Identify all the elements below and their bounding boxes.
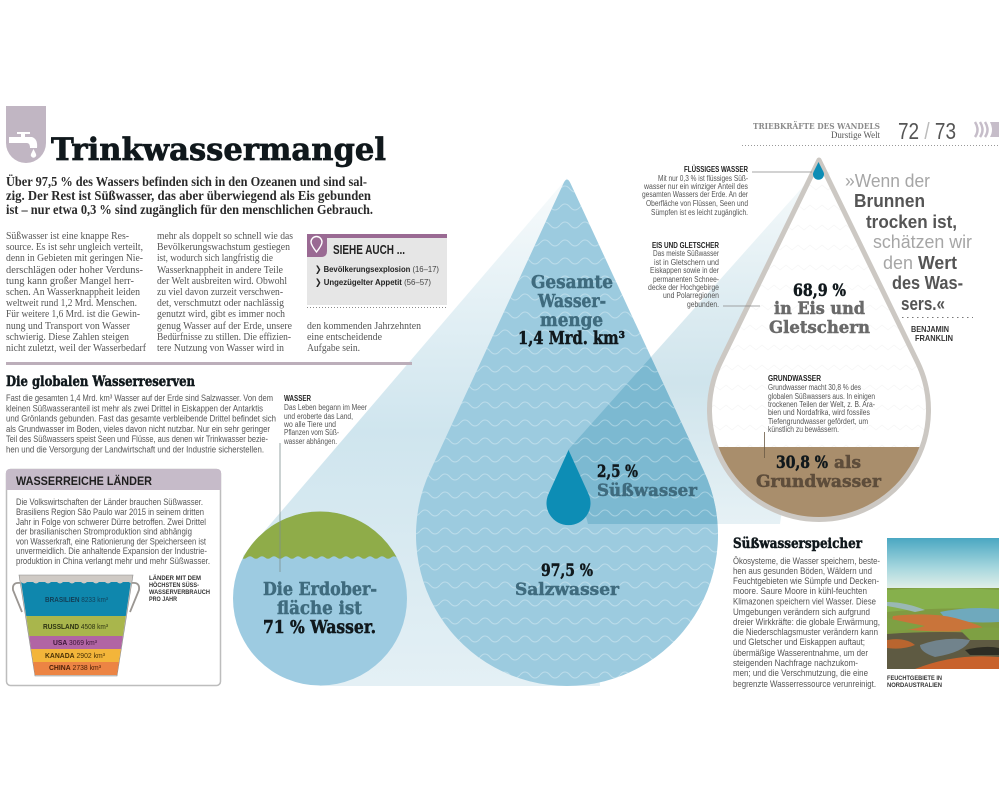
freshwater storage text: moore. Saure Moore in kühl-feuchten — [733, 586, 867, 597]
see also links: ❯ Bevölkerungsexplosion (16–17) — [315, 264, 439, 275]
label: water: wasser abhängen. — [283, 437, 337, 446]
groundwater label: Tiefengrundwasser gefördert, um — [768, 417, 868, 426]
body text column 2: Bevölkerungswachstum gestiegen — [157, 242, 290, 253]
intro text: zig. Der Rest ist Süßwasser, das aber überwiegend als Eis gebunden — [6, 189, 371, 204]
body text column 1: schwierig. Diese Zahlen steigen — [6, 332, 129, 343]
ice text — [769, 281, 870, 338]
page number: 72 / 73 — [898, 118, 956, 144]
icon: page chevrons — [975, 122, 999, 137]
salt water text: 97,5 % — [541, 561, 593, 581]
section text — [6, 393, 276, 454]
circle text: 71 % Wasser. — [263, 618, 376, 638]
icon: tiny liquid water drop — [813, 162, 824, 180]
body text column 1: schen. An Wasserknappheit leiden — [6, 287, 140, 298]
quote: trocken ist, — [866, 211, 957, 232]
bucket chart: USA 3069 km³ — [53, 638, 97, 647]
body text column 2: Wasserknappheit in andere Teile — [157, 265, 284, 276]
bucket caption: LÄNDER MIT DEM — [149, 574, 201, 582]
circle: earth surface — [233, 512, 407, 686]
bucket chart: RUSSLAND 4508 km³ — [43, 622, 108, 631]
quote: schätzen wir — [873, 231, 972, 252]
icon: tap badge — [6, 106, 46, 163]
see also heading: SIEHE AUCH ... — [333, 243, 405, 257]
freshwater storage text: dreier Wirkkräfte: die globale Erwärmung, — [733, 617, 880, 628]
freshwater storage text: men; und die Verschmutzung, die eine — [733, 668, 868, 679]
label: water: wo alle Tiere und — [283, 420, 336, 429]
freshwater storage heading: Süßwasserspeicher — [733, 536, 863, 552]
fresh water text: Süßwasser — [597, 481, 698, 501]
groundwater text: als — [834, 453, 861, 473]
running header — [753, 121, 880, 141]
body text column 1: derschlägen oder hoher Verduns- — [6, 265, 143, 276]
freshwater storage text: Ökosysteme, die Wasser speichern, beste- — [733, 556, 880, 567]
salt water text — [515, 561, 620, 600]
photo: wetlands — [887, 538, 999, 669]
panel text: produktion in China verlangt mehr und mehr Süßwasser. — [16, 556, 210, 566]
groundwater label — [768, 374, 875, 434]
bucket caption: WASSERVERBRAUCH — [149, 589, 210, 596]
label: water: und eroberte das Land, — [284, 412, 353, 421]
ice text: in Eis und — [774, 299, 865, 319]
label: ice and glaciers: permanenten Schnee- — [653, 275, 719, 284]
label: liquid water: Mit nur 0,3 % ist flüssiges Süß- — [658, 174, 748, 183]
section text: als Grundwasser im Boden, vieles davon nicht nutzbar. Nur ein sehr geringer — [6, 424, 270, 434]
label: water: WASSER — [284, 394, 311, 403]
body text column 1: source. Es ist sehr ungleich verteilt, — [6, 242, 143, 253]
quote author: BENJAMIN — [911, 324, 949, 334]
body text column 1: nung und Transport von Wasser — [6, 321, 131, 332]
icon: location pin — [307, 234, 327, 257]
label: ice and glaciers: und Polarregionen — [663, 291, 719, 300]
label: ice and glaciers — [648, 241, 719, 309]
quote — [845, 170, 972, 314]
freshwater storage text: steigenden Nachfrage nachzukom- — [733, 658, 858, 669]
body text column 2: tere Nutzung von Wasser wird in — [157, 343, 284, 354]
freshwater storage text: begrenzte Wasserressource verunreinigt. — [733, 679, 876, 690]
quote: den — [883, 252, 913, 273]
body text column 2: genug Wasser auf der Erde, unsere — [157, 321, 293, 332]
body text column 2: Bedürfnisse zu stillen. Die effizien- — [157, 332, 291, 343]
total water text: 1,4 Mrd. km³ — [518, 329, 625, 349]
label: liquid water: FLÜSSIGES WASSER — [684, 165, 748, 174]
quote: sers.« — [901, 293, 945, 314]
label: water: Das Leben begann im Meer — [284, 403, 367, 412]
running header: Durstige Welt — [831, 131, 880, 141]
background cone to the fresh water drop — [568, 172, 830, 524]
total water text: menge — [540, 311, 603, 331]
label: ice and glaciers: ist in Gletschern und — [654, 258, 719, 267]
groundwater label: künstlich zu bewässern. — [768, 425, 839, 434]
section text: Teil des Süßwassers speist Seen und Flüsse, aus denen wir Trinkwasser bezie- — [6, 434, 268, 444]
body text column 2: genutzt wird, gibt es immer noch — [157, 309, 285, 320]
panel: water rich countries — [6, 469, 221, 686]
label: liquid water: gesamten Wassers der Erde. An der — [642, 190, 748, 199]
body text column 2: det, verschmutzt oder nachlässig — [157, 298, 284, 309]
bucket caption — [149, 574, 210, 603]
salt water text: Salzwasser — [515, 580, 620, 600]
label: water: Pflanzen vom Süß- — [284, 428, 339, 437]
label: ice and glaciers: gebunden. — [687, 300, 719, 309]
bucket caption: HÖCHSTEN SÜSS- — [149, 580, 199, 589]
groundwater label: trockenen Teilen der Welt, z. B. Ara- — [768, 400, 875, 409]
panel text: Die Volkswirtschaften der Länder brauchen Süßwasser. — [16, 497, 203, 507]
body text column 2: ist, wodurch sich langfristig die — [157, 253, 274, 264]
label: ice and glaciers: Eiskappen sowie in der — [650, 266, 719, 275]
body text column 1 — [6, 231, 147, 354]
icon: fresh water drop — [546, 450, 590, 525]
body text column 2 — [157, 231, 293, 354]
section text: kleinen Süßwasseranteil ist mehr als zwei Drittel in Eiskappen der Antarktis — [6, 404, 263, 414]
big drop: total water — [416, 180, 718, 686]
fresh water text — [597, 462, 698, 501]
body text column 1: tung kann großer Mangel herr- — [6, 276, 134, 287]
groundwater label: bien und Nordafrika, wird fossiles — [768, 408, 870, 417]
label: ice and glaciers: EIS UND GLETSCHER — [652, 241, 719, 250]
panel text: Jahr in Folge von schwerer Dürre betroffen. Zwei Drittel — [16, 517, 206, 527]
photo caption: FEUCHTGEBIETE IN — [887, 675, 942, 682]
body text column 1: weltweit rund 1,2 Mrd. Menschen. — [6, 298, 137, 309]
bucket chart — [13, 575, 140, 676]
body text column 1: denn in Gebieten mit geringen Nie- — [6, 253, 143, 264]
bucket chart: BRASILIEN 8233 km³ — [45, 595, 108, 604]
groundwater text: 30,8 % — [776, 453, 828, 473]
ice text: Gletschern — [769, 318, 870, 338]
background cone to the circle — [243, 178, 600, 686]
groundwater text: Grundwasser — [756, 472, 882, 492]
label: liquid water: Oberfläche von Flüssen, Seen und — [646, 199, 748, 208]
label: liquid water: Sümpfen ist es leicht zugänglich. — [651, 208, 748, 217]
fresh water text: 2,5 % — [597, 462, 638, 482]
photo caption — [887, 675, 942, 689]
quote: Wert — [918, 252, 957, 273]
quote author — [911, 324, 953, 343]
panel: see also — [307, 234, 447, 308]
freshwater storage text: und Gletscher und Eiskappen auftaut; — [733, 637, 865, 648]
body text column 3: den kommenden Jahrzehnten — [307, 321, 421, 332]
circle text — [263, 580, 377, 638]
total water text — [518, 273, 625, 349]
gray drop: fresh water breakdown — [700, 160, 940, 527]
quote: des Was- — [892, 272, 963, 293]
intro text: Über 97,5 % des Wassers befinden sich in den Ozeanen und sind sal- — [6, 173, 367, 190]
panel heading: WASSERREICHE LÄNDER — [16, 473, 152, 488]
groundwater label: Grundwasser macht 30,8 % des — [768, 383, 861, 392]
intro text: ist – nur etwa 0,3 % sind zugänglich für den menschlichen Gebrauch. — [6, 203, 373, 218]
circle text: fläche ist — [277, 599, 362, 619]
groundwater label: GRUNDWASSER — [768, 374, 821, 383]
panel text: von Wasserkraft, eine Rationierung der Speicherseen ist — [16, 536, 206, 546]
section text: Fast die gesamten 1,4 Mrd. km³ Wasser auf der Erde sind Salzwasser. Von dem — [6, 393, 273, 403]
bucket chart: CHINA 2738 km³ — [49, 663, 101, 672]
title: Trinkwassermangel — [51, 132, 386, 168]
body text column 3: Aufgabe sein. — [307, 343, 360, 354]
label: water — [283, 394, 367, 446]
freshwater storage text: die Niederschlagsmuster verändern kann — [733, 627, 878, 638]
bucket chart: KANADA 2902 km³ — [45, 651, 105, 660]
see also links: ❯ Ungezügelter Appetit (56–57) — [315, 277, 431, 288]
body text column 1: Süßwasser ist eine knappe Res- — [6, 231, 129, 242]
freshwater storage text: übermäßige Wasserentnahme, um der — [733, 648, 868, 659]
section text: und Grönlands gebunden. Fast das gesamte verbleibende Drittel befindet sich — [6, 414, 276, 424]
freshwater storage text: Umgebungen verändern sich aufgrund — [733, 607, 870, 618]
intro text — [6, 173, 373, 218]
freshwater storage text — [733, 556, 880, 690]
groundwater label: globalen Süßwassers aus. In einigen — [768, 392, 875, 401]
circle text: Die Erdober- — [263, 580, 377, 600]
freshwater storage text: Klimazonen speichern viel Wasser. Diese — [733, 596, 876, 608]
panel text: Brasiliens Region São Paulo war 2015 in seinem dritten — [16, 507, 204, 517]
body text column 2: zu viel davon zurzeit verschwen- — [157, 287, 283, 298]
panel text: unvermeidlich. Die anhaltende Expansion der Industrie- — [16, 546, 207, 556]
label: liquid water: wasser nur ein winziger Anteil des — [643, 182, 748, 191]
quote author: FRANKLIN — [915, 333, 953, 343]
body text column 2: mehr als doppelt so schnell wie das — [157, 231, 293, 242]
total water text: Gesamte — [531, 273, 613, 293]
groundwater text — [756, 453, 882, 492]
panel text: der brasilianischen Stromproduktion sind abhängig — [16, 526, 192, 536]
body text column 1: nicht zuletzt, weil der Wasserbedarf — [6, 343, 147, 354]
freshwater storage text: Feuchtgebieten wie Sümpfe und Decken- — [733, 576, 879, 587]
body text column 1: Für weitere 1,6 Mrd. ist die Gewin- — [6, 309, 140, 320]
label: ice and glaciers: decke der Hochgebirge — [648, 283, 719, 292]
body text column 2: der Welt ausbreiten wird. Obwohl — [157, 276, 287, 287]
total water text: Wasser- — [537, 292, 606, 312]
ice text: 68,9 % — [793, 281, 846, 301]
running header: TRIEBKRÄFTE DES WANDELS — [753, 121, 880, 131]
panel text — [16, 497, 210, 566]
freshwater storage text: hen aus gesunden Böden, Wäldern und — [733, 566, 872, 577]
quote: »Wenn der — [845, 170, 930, 191]
bucket caption: PRO JAHR — [149, 596, 177, 603]
label: liquid water — [642, 165, 748, 217]
body text column 3: eine entscheidende — [307, 332, 383, 343]
photo caption: NORDAUSTRALIEN — [887, 682, 942, 689]
quote: Brunnen — [854, 190, 925, 211]
body text column 3 — [307, 321, 421, 354]
see also links — [315, 264, 439, 288]
section text: hen und die Versorgung der Landwirtschaft und der Industrie sicherstellen. — [6, 444, 264, 454]
section heading: Die globalen Wasserreserven — [6, 374, 195, 390]
label: ice and glaciers: Das meiste Süßwasser — [653, 249, 719, 258]
